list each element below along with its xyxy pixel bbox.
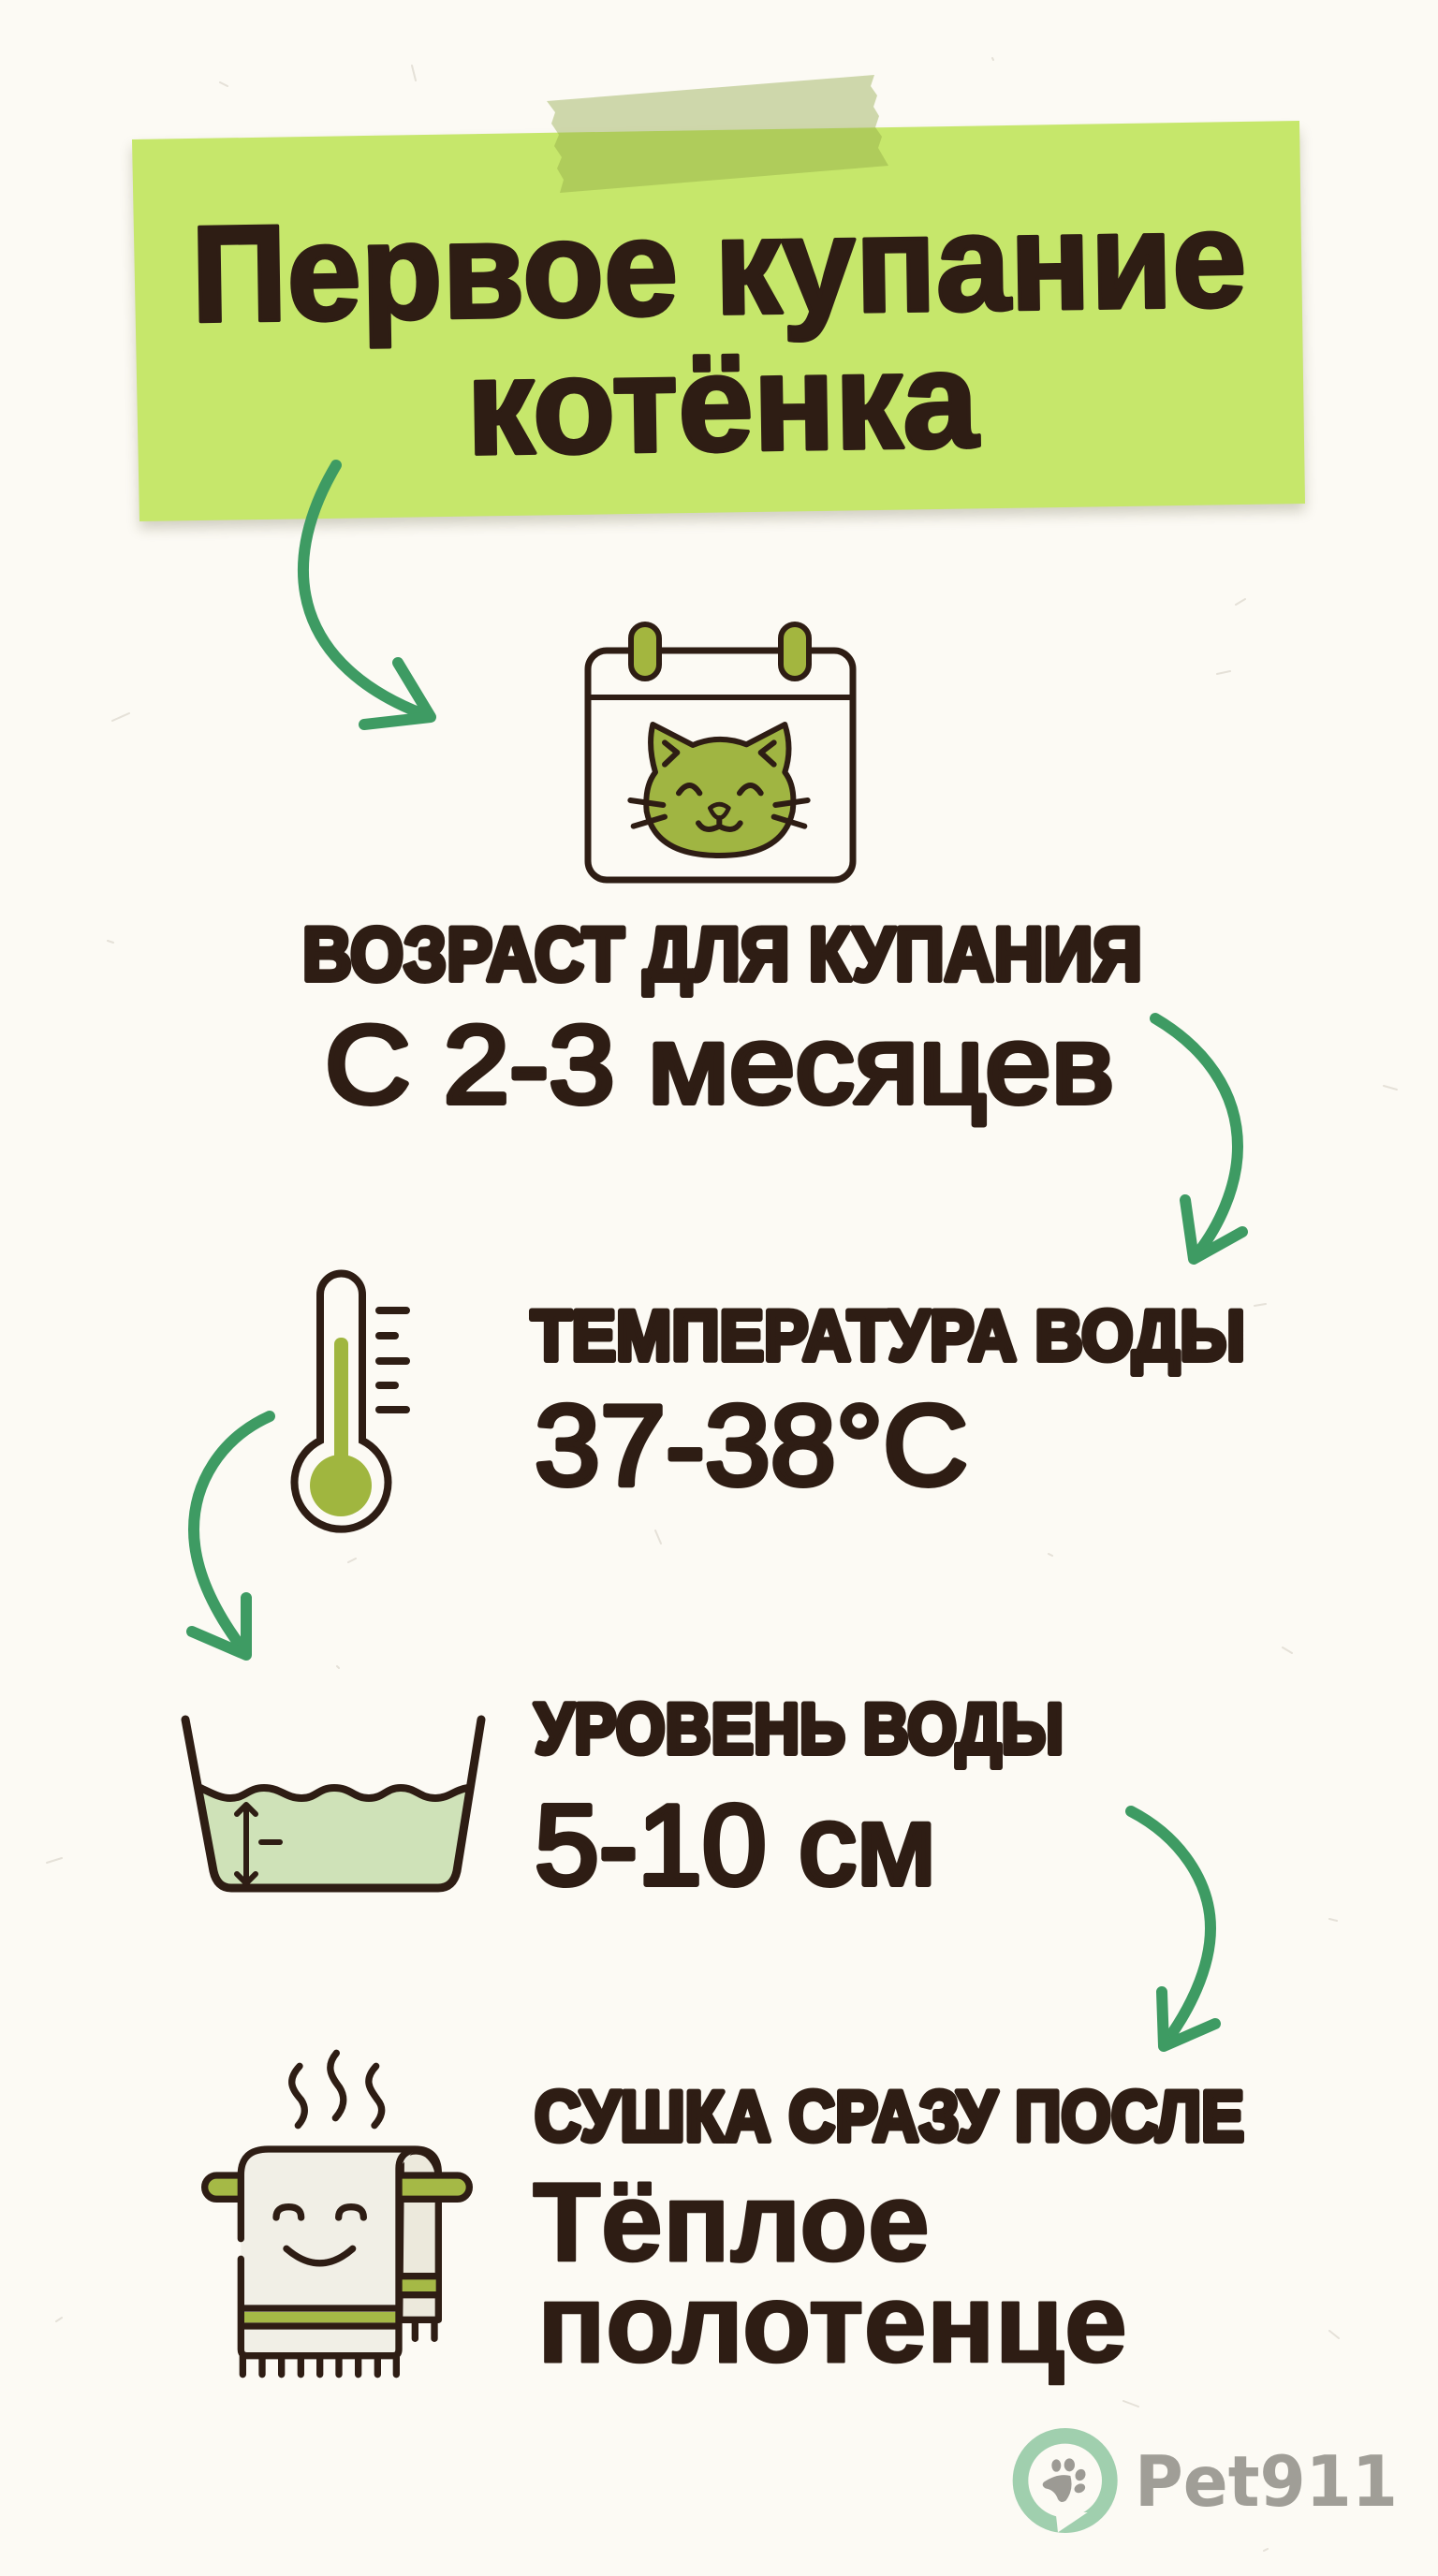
masking tape	[547, 75, 888, 193]
arrow: age to temperature	[1155, 1018, 1242, 1259]
arrow: water level to drying	[1131, 1811, 1215, 2046]
heading: age: ВОЗРАСТ ДЛЯ КУПАНИЯ	[302, 913, 1142, 997]
icon: basin with water	[185, 1720, 481, 1888]
arrow: title to age	[303, 465, 431, 724]
icon: calendar with cat	[588, 624, 853, 880]
value: drying	[533, 2159, 1127, 2386]
title text: котёнка	[465, 323, 980, 483]
value: age: С 2-3 месяцев	[325, 1003, 1114, 1127]
title note panel	[132, 121, 1305, 529]
value: water level: 5-10 см	[535, 1781, 936, 1909]
title text	[190, 183, 1250, 487]
logo: Pet911: Pet911	[1135, 2440, 1398, 2523]
value: drying: полотенце	[537, 2261, 1127, 2386]
icon: logo paw bubble	[1020, 2436, 1109, 2532]
green note sheet	[132, 121, 1305, 521]
heading: drying: СУШКА СРАЗУ ПОСЛЕ	[535, 2077, 1244, 2157]
heading: temperature: ТЕМПЕРАТУРА ВОДЫ	[531, 1296, 1245, 1376]
icon: thermometer	[294, 1273, 406, 1530]
logo: Pet911	[1020, 2436, 1398, 2532]
heading: water level: УРОВЕНЬ ВОДЫ	[535, 1690, 1064, 1769]
icon: cat face	[630, 724, 808, 856]
value: temperature: 37-38°С	[535, 1382, 968, 1509]
title text: Первое купание	[190, 183, 1247, 350]
arrow: temperature to water level	[192, 1416, 270, 1655]
icon: towel with steam	[205, 2053, 469, 2375]
value: drying: Тёплое	[533, 2159, 930, 2285]
